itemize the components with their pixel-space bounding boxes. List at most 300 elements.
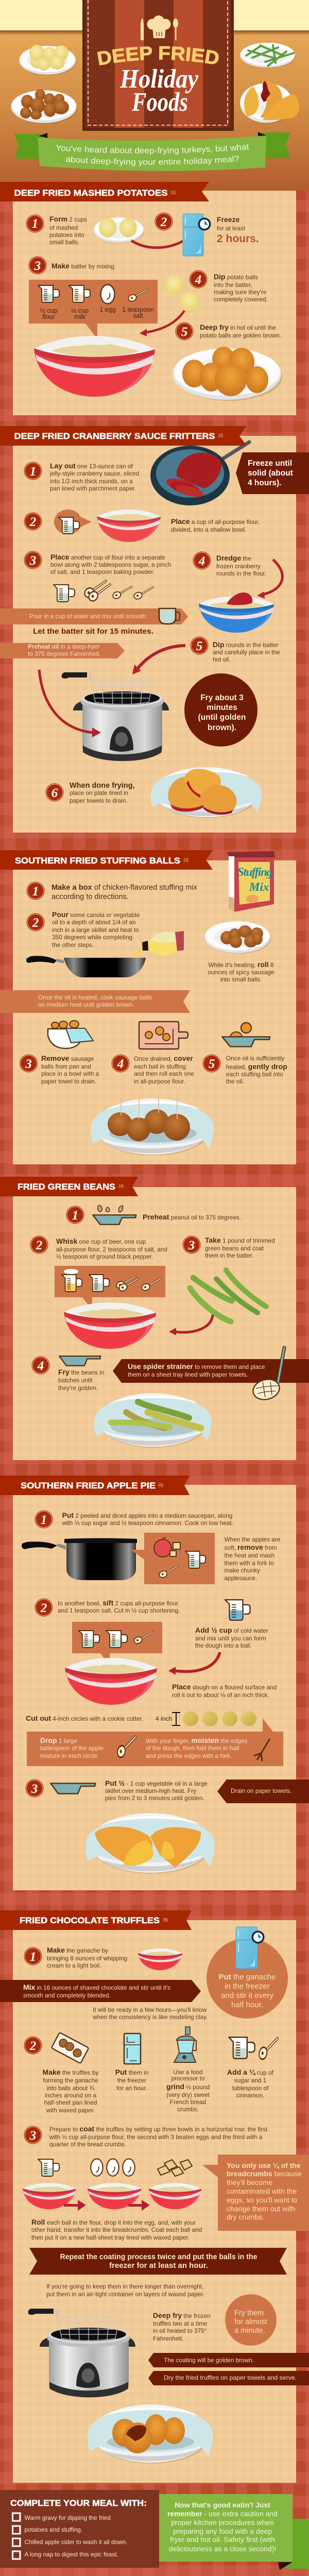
- ribbon: use spider strainer: them on a sheet tray lined with paper towels.: [128, 1371, 248, 1378]
- step 3 badge: [24, 551, 42, 569]
- panel: complete your meal: [0, 2490, 159, 2568]
- step 6 text: When done frying,: [70, 782, 134, 790]
- header wooden table: [0, 0, 309, 191]
- heading ribbon: FRIED CHOCOLATE TRUFFLES: [20, 1916, 160, 1925]
- step 1 text: Make a box of chicken-flavored stuffing mix: [52, 884, 197, 892]
- step 2 text: and 1 teaspoon salt. Cut in ½ cup shortening.: [58, 1607, 180, 1614]
- heading: COMPLETE YOUR MEAL WITH:: [10, 2498, 147, 2508]
- step 3 text: Remove sausage: [41, 1054, 94, 1062]
- step 2 text: Place a cup of all-purpose flour,: [171, 517, 260, 526]
- callout: breadcrumbs note: breadcrumbs because: [227, 2170, 302, 2178]
- step 1 text: Form 2 cups: [49, 215, 87, 223]
- step 3 badge: [20, 1054, 38, 1073]
- place dough text: roll it out to about ⅛ of an inch thick.: [172, 1691, 269, 1699]
- consistency text: It will be ready in a few hours—you'll know: [93, 2006, 207, 2013]
- step 4 text: rounds in the flour.: [216, 570, 266, 577]
- title banner: [82, 0, 234, 131]
- step 2 text: ½ teaspoon of ground black pepper.: [56, 1253, 153, 1260]
- remove from heat text: soft, remove from: [225, 1543, 277, 1551]
- step 2 badge: 2: [40, 1601, 47, 1615]
- ribbon: use spider strainer: Use spider strainer to remove them and place: [128, 1362, 265, 1370]
- callout: fry for a minute: a minute.: [234, 2327, 265, 2335]
- step 4 text: into the batter,: [214, 281, 252, 289]
- callout: breadcrumbs note: eggs, so you'll want to: [227, 2196, 298, 2204]
- deep fry text: truffles two at a time: [153, 2320, 208, 2327]
- icon: three eggs: [91, 2159, 135, 2176]
- intro text: You've heard about deep-frying turkeys, but what: [56, 144, 249, 155]
- step 3 text: Place another cup of flour into a separate: [50, 553, 165, 561]
- checkboxes: [12, 2513, 20, 2559]
- icon: water cup: [225, 1600, 250, 1620]
- step 6 text: place on plate lined in: [70, 789, 128, 796]
- ingredient callout box: 1 egg: [99, 306, 116, 313]
- callout: breadcrumbs note: [202, 2155, 309, 2231]
- title: Holiday Foods: Holiday: [119, 64, 199, 94]
- step 5 text: hot oil.: [213, 656, 231, 663]
- icon: pan: [59, 1356, 100, 1366]
- potato balls: [165, 275, 200, 313]
- step 1 badge: 1: [32, 217, 38, 231]
- step 2 text c: processor to: [171, 2075, 205, 2082]
- step 1 text: jelly-style cranberry sauce, sliced: [49, 470, 139, 477]
- remove from heat text: When the apples are: [225, 1536, 281, 1543]
- heading ribbon: [0, 850, 213, 870]
- step 3 text: Make batter by mixing:: [52, 262, 116, 270]
- heading ribbon: DEEP FRIED CRANBERRY SAUCE FRITTERS: [14, 432, 215, 441]
- step 4 text: completely covered.: [214, 296, 268, 303]
- roll text: then put it on a new half-sheet tray lined with waxed paper.: [31, 2234, 190, 2241]
- step 1 text: pan lined with parchment paper.: [50, 485, 136, 492]
- add water text: the dough into a ball.: [195, 1642, 252, 1649]
- ingredient callout box: 1 teaspoon: [122, 306, 154, 313]
- red bowl: [97, 510, 161, 542]
- step 4 badge: [111, 1054, 130, 1073]
- step 1 text: Put 2 peeled and diced apples into a medium saucepan, along: [62, 1511, 232, 1519]
- step 5 text: each stuffing ball into: [226, 1071, 283, 1078]
- step 2 badge: 2: [29, 515, 36, 529]
- ribbon: golden brown: [148, 2353, 309, 2367]
- step 6 badge: 6: [52, 786, 58, 800]
- ingredient callout box: milk: [74, 313, 86, 320]
- deep fry text: Deep fry the frozen: [153, 2311, 211, 2319]
- step 4 text: in all-purpose flour.: [134, 1078, 185, 1085]
- step 5 text: Dip rounds in the batter: [213, 640, 278, 649]
- step 3 text: quarter of the bread crumbs.: [49, 2141, 126, 2148]
- callout: fry for a minute: Fry them: [234, 2309, 264, 2317]
- step 2 text a: half-sheet pan lined: [44, 2099, 97, 2106]
- step 4 badge: 4: [198, 554, 205, 568]
- panel: fried chocolate truffles: [0, 1910, 309, 2483]
- remove from heat text: make chunky: [225, 1567, 260, 1574]
- step 1 badge: 1: [32, 885, 39, 899]
- reminder text: preparing any food with a deep: [173, 2527, 272, 2535]
- callout: fry about 3 minutes: Fry about 3: [200, 693, 244, 702]
- icon: fork: [254, 1739, 270, 1761]
- step 1 badge: 1: [41, 1513, 47, 1527]
- step 4 text: Once drained, cover: [134, 1054, 193, 1062]
- step 3 text: Prepare to coat the truffles by setting up three bowls in a horizontal row: the first: [49, 2125, 267, 2133]
- let the batter sit: Let the batter sit for 15 minutes.: [33, 628, 153, 636]
- plate of fried apple pies: [85, 1813, 215, 1874]
- drop and moisten callout: mixture in each circle.: [40, 1752, 99, 1759]
- plate of stuffing balls on toothpicks: [91, 1097, 214, 1156]
- callout: breadcrumbs note: they'll become: [227, 2178, 272, 2187]
- drop and moisten callout: Drop 1 large: [40, 1736, 77, 1744]
- step 3 text: skillet over medium-high heat. Fry: [105, 1787, 196, 1794]
- callout: freezer circle: half hour.: [231, 2001, 263, 2009]
- red mixing bowl: [34, 336, 155, 397]
- step 1 text: according to directions.: [52, 893, 129, 901]
- step 2 text d: cinnamon.: [236, 2092, 264, 2099]
- reminder text: proper kitchen procedures when: [171, 2518, 274, 2527]
- step 4 text: frozen cranberry: [216, 563, 261, 570]
- callout: fry about 3 minutes: (until golden: [198, 713, 246, 722]
- title: Deep Fried: DEEP FRIED: [97, 46, 219, 65]
- step 4 badge: 4: [195, 273, 201, 287]
- plate: stuffing balls: [11, 89, 77, 124]
- callout: freeze until solid: Freeze until: [248, 459, 292, 468]
- panel: deep fried cranberry sauce fritters: [0, 426, 309, 833]
- step 4 badge: 4: [37, 1359, 44, 1373]
- ingredient icons: [54, 581, 153, 603]
- ribbon: mix in chocolate: smooth and completely blended.: [23, 1992, 111, 1999]
- ribbon: cook sausage balls: Once the oil is heated, cook sausage balls: [38, 994, 152, 1001]
- step 1 badge: 1: [30, 1950, 36, 1964]
- ribbon: cook sausage balls: on medium heat until golden brown.: [38, 1001, 134, 1008]
- heading ribbon: [2]: [218, 433, 223, 438]
- step 1 text: potatoes into: [49, 231, 84, 239]
- step 3 badge: [182, 1235, 201, 1254]
- red bowl: [64, 1302, 156, 1349]
- panel: deep fried mashed potatoes: [0, 182, 296, 415]
- deep fryer: [62, 672, 169, 761]
- drop and moisten callout: of the dough, then fold them in half: [146, 1744, 239, 1752]
- step 2 text a: with waxed paper.: [46, 2107, 95, 2114]
- step 2 text c: (very dry) sweet: [166, 2091, 210, 2098]
- step 1 badge: [24, 1947, 42, 1965]
- heading ribbon: SOUTHERN FRIED STUFFING BALLS: [15, 856, 180, 866]
- step 2 text: Freeze: [217, 215, 240, 224]
- intro green ribbon: [14, 132, 290, 171]
- step 3 text: green beans and coat: [205, 1245, 264, 1252]
- heading ribbon: [4]: [119, 1184, 124, 1189]
- icon: food processor: [174, 2027, 196, 2062]
- drop and moisten callout: and press the edges with a fork.: [146, 1752, 232, 1759]
- step 3 badge: 3: [29, 2129, 36, 2143]
- sausage text: While it's heating, roll 8: [208, 960, 274, 969]
- step 2 text a: forming the ganache: [43, 2077, 98, 2084]
- step 2 text d: tablespoon of: [232, 2084, 269, 2092]
- callout: fry for a minute: for almost: [234, 2318, 267, 2326]
- callout: breadcrumbs note: change them out with: [227, 2205, 295, 2213]
- roll text: Roll each ball in the flour, drop it into the egg, and, with your: [31, 2218, 196, 2226]
- oil bottle pouring: [128, 931, 184, 959]
- step 1 badge: [24, 462, 42, 480]
- step 3 text: Put ½ - 1 cup vegetable oil in a large: [105, 1779, 208, 1787]
- step 1 text: of mashed: [49, 224, 78, 231]
- callout: fry for a minute: [225, 2294, 277, 2346]
- step 1 text: small balls.: [49, 239, 79, 246]
- callout: freezer circle: [207, 1927, 288, 2019]
- reminder text: remember - use extra caution and: [167, 2510, 278, 2518]
- heading ribbon: [0, 1910, 192, 1930]
- step 1 badge: [26, 214, 44, 233]
- callout: freeze until solid: solid (about: [248, 469, 293, 478]
- cut out text: Cut out 4-inch circles with a cookie cutter.: [26, 1714, 143, 1722]
- step 3 badge: 3: [188, 1239, 195, 1252]
- step 4 badge: [190, 270, 207, 289]
- drop and moisten callout: With your finger, moisten the edges: [146, 1736, 247, 1744]
- panel: safety reminder: [159, 2494, 309, 2570]
- step 3 badge: [24, 2126, 42, 2144]
- step 2 text b: for an hour.: [116, 2084, 147, 2092]
- step 3 text: balls from pan and: [41, 1063, 91, 1070]
- step 1 text: into 1/2-inch thick rounds, on a: [50, 478, 133, 485]
- step 2 text d: sugar and 1: [234, 2077, 266, 2084]
- step 4 text: Fry the beans in: [58, 1368, 104, 1376]
- step 4 text: they're golden.: [58, 1384, 98, 1392]
- step 4 badge: 4: [117, 1057, 124, 1071]
- icon: cutting board: [139, 1022, 188, 1049]
- step 2 badge: [24, 512, 42, 531]
- step 6 text: paper towels to drain.: [70, 797, 128, 804]
- ribbon: golden brown: The coating will be golden brown.: [164, 2357, 254, 2364]
- step 1 text: with ⅓ cup sugar and ½ teaspoon cinnamon. Cook on low heat.: [62, 1519, 233, 1527]
- step 2 badge: 2: [36, 1239, 42, 1252]
- callout: freezer circle: Put the ganache: [219, 1973, 276, 1981]
- icon: freezer: [124, 2033, 141, 2064]
- icon: freezer with clock: [183, 214, 211, 256]
- consistency text: when the consistency is like modeling clay.: [92, 2013, 208, 2021]
- panel: fried green beans: [0, 1177, 309, 1460]
- raw green beans: [190, 1270, 266, 1321]
- step 2 text a: Make the truffles by: [43, 2068, 98, 2076]
- callout: breadcrumbs note: dry crumbs.: [227, 2213, 264, 2221]
- title: Holiday Foods: Foods: [131, 88, 188, 117]
- ribbon: repeat coating: Repeat the coating process twice and put the balls in the: [60, 2252, 258, 2261]
- step 1 text: Preheat peanut oil to 375 degrees.: [143, 1213, 241, 1221]
- arrow to fryer basket: [132, 646, 185, 674]
- step 3 text: Take 1 pound of trimmed: [205, 1236, 275, 1244]
- step 2 text: In another bowl, sift 2 cups all-purpose flour: [58, 1599, 178, 1607]
- step 3 badge: 3: [31, 1782, 38, 1796]
- step 1 text: Lay out one 13-ounce can of: [50, 462, 133, 470]
- sausage text: into small balls.: [220, 976, 262, 983]
- icon: bowl with paper towel: [48, 1021, 93, 1048]
- plate of potato balls: [94, 217, 144, 243]
- callout: freeze until solid: [236, 452, 309, 494]
- step 1 text: Make the ganache by: [47, 1946, 108, 1954]
- step 2 text: for at least: [217, 225, 246, 232]
- checklist: Warm gravy for dipping the fried: [25, 2514, 111, 2521]
- step 2 text: 350 degrees while completing: [52, 934, 132, 941]
- reminder text: deliciousness as a close second)!: [169, 2545, 276, 2553]
- ribbon: cook sausage balls: [0, 990, 190, 1013]
- arrow to bowl: [169, 1315, 213, 1335]
- ribbon: dry and serve: Dry the fried truffles on paper towels and serve.: [164, 2374, 297, 2381]
- heading ribbon: FRIED GREEN BEANS: [18, 1182, 115, 1192]
- ingredient callout box: ½ cup: [71, 307, 89, 314]
- ribbon: mix in chocolate: [0, 1980, 201, 2002]
- step 2 badge: [154, 212, 173, 231]
- heading ribbon: SOUTHERN FRIED APPLE PIE: [21, 1481, 156, 1490]
- step 2 text: Pour some canola or vegetable: [52, 910, 140, 919]
- remove from heat text: the heat and mash: [225, 1552, 274, 1559]
- step 2 badge: 2: [29, 2039, 36, 2053]
- skillet: [26, 956, 146, 977]
- step 1 badge: [27, 882, 44, 900]
- arrow to fryer: [140, 311, 184, 336]
- dough circles: [183, 1711, 256, 1726]
- ribbon: preheat oil: Preheat oil: [28, 643, 59, 650]
- step 3 text: with ½ cup all-purpose flour, the second with 3 beaten eggs and the third with a: [49, 2133, 263, 2141]
- heading ribbon: [0, 1476, 190, 1495]
- ribbon: use spider strainer: [113, 1359, 309, 1383]
- checklist: Chilled apple cider to wash it all down.: [25, 2538, 128, 2546]
- step 5 text: Deep fry in hot oil until the: [200, 323, 276, 331]
- step 3 badge: [29, 257, 46, 274]
- ribbon: repeat coating: [29, 2248, 287, 2275]
- callout: fry about 3 minutes: minutes: [207, 703, 237, 712]
- arrow to fryer body: [39, 670, 101, 737]
- step 2 text c: Use a food: [173, 2069, 203, 2076]
- ribbon: mix in chocolate: Mix in 16 ounces of shaved chocolate and stir until it's: [23, 1983, 170, 1991]
- step 4 text: and then roll each one: [134, 1070, 194, 1077]
- reminder text: Now that's good eatin'! Just: [175, 2501, 270, 2509]
- step 1 badge: [66, 1206, 84, 1224]
- callout: 2 hours: 2 hours.: [217, 233, 259, 245]
- ingredient callout box: ½ cup: [40, 307, 58, 314]
- callout: breadcrumbs note: contaminated with the: [227, 2187, 297, 2195]
- step 2 text a: into balls about ¾: [47, 2084, 94, 2092]
- step 1 badge: 1: [30, 465, 36, 479]
- remove from heat text: applesauce.: [225, 1574, 257, 1582]
- stuffing mix box: [227, 851, 275, 912]
- plate of fried potato balls: [173, 347, 282, 401]
- drop and moisten callout: [27, 1718, 283, 1766]
- reminder text: fryer and hot oil. Safety first (with: [170, 2535, 275, 2544]
- add water text: and mix until you can form: [195, 1635, 266, 1642]
- red bowl: [65, 1658, 157, 1705]
- ingredient callout box: salt: [133, 312, 143, 319]
- checklist: potatoes and stuffing.: [25, 2526, 82, 2533]
- step 2 text: all-purpose flour, 2 teaspoons of salt, and: [56, 1246, 167, 1253]
- icon: chef hat with knife and spoon: [141, 15, 178, 40]
- plate of fried green beans: [94, 1393, 211, 1448]
- overnight text: If you're going to keep them in there longer than overnight,: [46, 2283, 203, 2290]
- step 2 text: Whisk one cup of beer, one cup: [56, 1237, 146, 1245]
- heading ribbon: [6]: [163, 1918, 168, 1922]
- sausage text: ounces of spicy sausage: [208, 969, 274, 976]
- step 3 text: paper towel to drain.: [41, 1078, 96, 1085]
- icon: freezer with clock: [236, 1927, 265, 1969]
- step 5 badge: 5: [209, 1057, 215, 1071]
- step 3 badge: 3: [34, 259, 41, 273]
- blue bowl with cranberry: [199, 592, 274, 633]
- step 4 text: each ball in stuffing: [134, 1063, 186, 1070]
- title: Holiday Foods: [119, 64, 199, 117]
- plate of sausage balls: [204, 921, 271, 954]
- step 4 badge: [32, 1356, 49, 1375]
- ingredient callout box: flour: [42, 313, 55, 320]
- step 2 text c: crumbs.: [177, 2106, 199, 2113]
- ribbon: repeat coating: freezer for at least an hour.: [109, 2261, 208, 2270]
- heading ribbon: [5]: [159, 1483, 163, 1487]
- heading ribbon: DEEP FRIED MASHED POTATOES: [14, 189, 168, 198]
- box label text: Stuffing: [237, 866, 272, 878]
- panel: southern fried apple pie: [0, 1476, 309, 1890]
- step 2 text b: the freezer: [117, 2077, 146, 2084]
- step 2 badge: 2: [32, 916, 39, 930]
- step 3 text: them in the batter.: [205, 1252, 253, 1259]
- step 2 text d: Add a ¼ cup of: [227, 2068, 273, 2076]
- step 2 text a: inches around on a: [45, 2092, 97, 2099]
- arrow to bowl: [168, 1652, 220, 1675]
- step 6 badge: [45, 783, 64, 802]
- step 1 text: bringing 8 ounces of whipping: [47, 1955, 127, 1962]
- plate of fried truffles: [88, 2404, 213, 2464]
- ribbon: pour water: Pour in a cup of water and mix until smooth.: [29, 613, 147, 620]
- ribbon: preheat oil: [0, 643, 125, 658]
- icon: tablespoon: [116, 1737, 135, 1759]
- four inch measure: [156, 1713, 180, 1725]
- icon: flour cup: [38, 2159, 59, 2176]
- ribbon: drain on paper towels: [217, 1780, 309, 1803]
- step 1 badge: 1: [72, 1209, 78, 1223]
- step 2 text c: French bread: [170, 2098, 206, 2106]
- plate: mashed potato balls: [19, 45, 76, 75]
- checklist: A long nap to digest this epic feast.: [25, 2551, 118, 2558]
- step 5 text: and carefully place in the: [213, 649, 280, 656]
- heading ribbon: [1]: [171, 190, 176, 195]
- step 2 text: oil to a depth of about 1/4 of an: [52, 919, 136, 926]
- icon: mug: [159, 608, 180, 624]
- heading ribbon: [3]: [184, 858, 188, 862]
- plate: green beans: [240, 43, 296, 68]
- step 2 badge: [35, 1598, 53, 1617]
- step 1 badge: [35, 1511, 53, 1528]
- step 2 badge: [30, 1235, 48, 1254]
- icon: tray of truffles: [52, 2032, 89, 2063]
- icon: pan with oil drops: [93, 1205, 136, 1225]
- callout: freeze until solid: 4 hours).: [248, 479, 281, 487]
- step 5 badge: 5: [196, 639, 202, 653]
- step 2 badge: [24, 2036, 42, 2055]
- heading ribbon: [0, 1177, 138, 1196]
- deep fryer: [28, 2309, 135, 2397]
- four inch measure: 4 inch: [156, 1715, 172, 1722]
- step 5 badge: [191, 637, 208, 654]
- icon: spider strainer: [251, 1348, 284, 1402]
- step 3 text: of salt, and 1 teaspoon baking powder.: [50, 568, 154, 575]
- callout: freezer circle: in the freezer: [225, 1982, 270, 1991]
- red bowl: [138, 1948, 182, 1970]
- panel: southern fried stuffing balls: [0, 850, 296, 1164]
- ribbon: preheat oil: to 375 degrees Fahrenheit.: [28, 650, 101, 657]
- step 4 text: Dip potato balls: [214, 273, 258, 281]
- step 3 badge: 3: [29, 554, 36, 568]
- step 2 text c: grind ½ pound: [166, 2082, 210, 2091]
- step 1 text: cream to a light boil.: [47, 1962, 101, 1969]
- icon: pan: [50, 1784, 95, 1794]
- callout: fry about 3 minutes: [184, 673, 258, 747]
- callout: breadcrumbs note: You only use ¼ of the: [227, 2161, 301, 2170]
- heading ribbon: [0, 182, 209, 201]
- step 5 text: potato balls are golden brown.: [200, 332, 281, 339]
- step 3 text: pies from 2 to 3 minutes until golden.: [105, 1794, 204, 1802]
- step 4 text: making sure they're: [214, 289, 267, 296]
- step 4 text: batches until: [58, 1377, 92, 1384]
